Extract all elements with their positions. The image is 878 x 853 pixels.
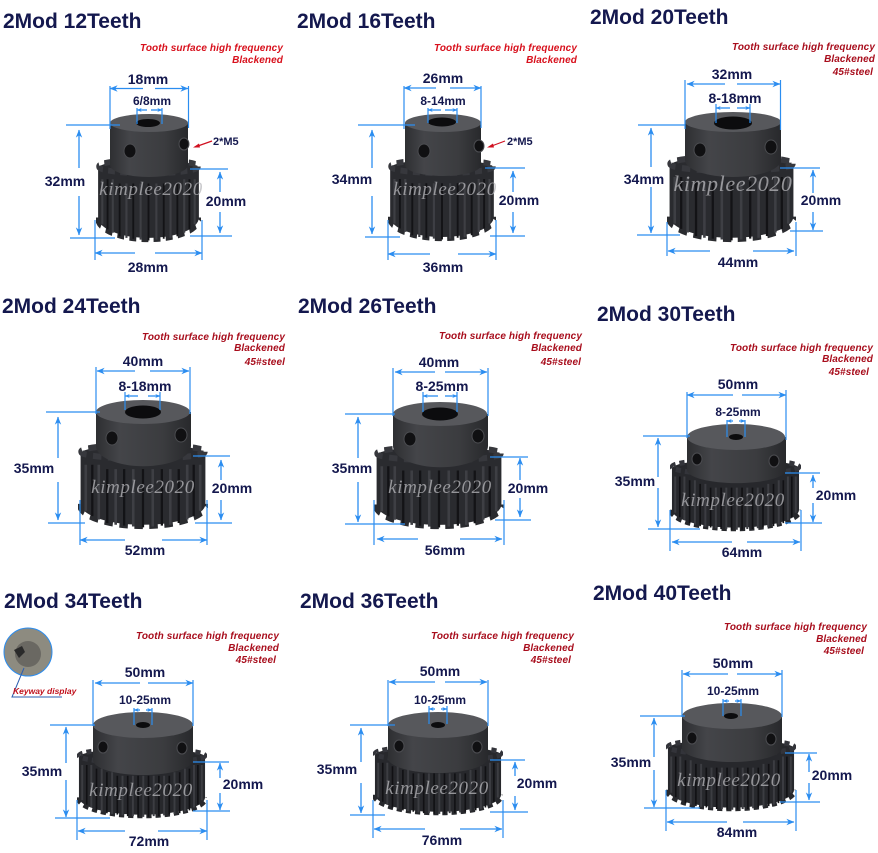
callout: 2*M5	[487, 136, 533, 148]
note: Blackened	[234, 343, 286, 354]
note	[136, 631, 280, 666]
note	[730, 343, 874, 378]
note: 45#steel	[832, 67, 873, 78]
panel: 2Mod 40Teeth	[593, 582, 868, 840]
callout: 2*M5: 2*M5	[507, 136, 533, 148]
gear photo: kimplee2020	[393, 179, 497, 200]
heading: 2Mod 24Teeth	[2, 295, 140, 318]
dimension labels	[624, 66, 841, 270]
callout: 2*M5: 2*M5	[213, 136, 239, 148]
note	[439, 331, 583, 368]
note: Tooth surface high frequency	[724, 622, 867, 633]
dimension labels: 20mm	[499, 192, 539, 208]
dimension labels: 40mm	[419, 354, 459, 370]
panel: 2Mod 24Teeth	[2, 295, 286, 558]
dimension labels: 10-25mm	[707, 684, 759, 698]
dimension labels: 50mm	[713, 655, 753, 671]
note: 45#steel	[244, 357, 285, 368]
gear photo	[79, 400, 207, 527]
dimension labels: 20mm	[517, 775, 557, 791]
note	[724, 622, 868, 657]
note: Tooth surface high frequency	[434, 43, 577, 54]
note: Tooth surface high frequency	[732, 42, 875, 53]
gear photo: kimplee2020	[91, 477, 195, 498]
panel: 2Mod 30Teeth	[597, 303, 874, 560]
heading: 2Mod 26Teeth	[298, 295, 436, 318]
dimension labels	[45, 71, 246, 275]
dimension labels: 64mm	[722, 544, 762, 560]
dimension labels: 26mm	[423, 70, 463, 86]
note: Blackened	[526, 55, 578, 66]
dimension lines	[46, 367, 232, 545]
dimension labels: 32mm	[45, 173, 85, 189]
panel: 2Mod 36Teeth	[300, 590, 575, 848]
gear photo	[375, 402, 503, 527]
note	[732, 42, 876, 78]
gear photo	[668, 112, 795, 240]
dimension labels: 8-18mm	[709, 90, 761, 106]
heading: 2Mod 40Teeth	[593, 582, 731, 605]
dimension labels: 52mm	[125, 542, 165, 558]
dimension lines	[637, 80, 823, 256]
dimension labels: 35mm	[317, 761, 357, 777]
note: 45#steel	[530, 655, 571, 666]
note: Tooth surface high frequency	[140, 43, 283, 54]
dimension labels: 35mm	[22, 763, 62, 779]
dimension lines	[50, 680, 230, 840]
note: 45#steel	[540, 357, 581, 368]
note: Tooth surface high frequency	[136, 631, 279, 642]
dimension labels	[332, 354, 548, 558]
dimension labels: 18mm	[128, 71, 168, 87]
dimension labels	[317, 663, 557, 848]
note: Tooth surface high frequency	[730, 343, 873, 354]
panel: 2Mod 34Teeth	[4, 590, 280, 849]
dimension labels: 84mm	[717, 824, 757, 840]
dimension labels: 20mm	[508, 480, 548, 496]
dimension lines	[640, 670, 820, 831]
dimension labels	[332, 70, 539, 275]
heading: 2Mod 36Teeth	[300, 590, 438, 613]
dimension lines	[643, 390, 822, 551]
dimension labels	[615, 376, 856, 560]
note: 45#steel	[823, 646, 864, 657]
dimension labels: 20mm	[206, 193, 246, 209]
gear photo: kimplee2020	[673, 171, 793, 196]
dimension labels	[22, 664, 263, 849]
inset: keyway display: Keyway display	[13, 686, 78, 696]
dimension labels: 20mm	[816, 487, 856, 503]
note: Tooth surface high frequency	[431, 631, 574, 642]
gear photo	[667, 703, 795, 810]
dimension labels: 35mm	[14, 460, 54, 476]
dimension labels: 34mm	[624, 171, 664, 187]
dimension labels: 50mm	[420, 663, 460, 679]
panel: 2Mod 26Teeth	[298, 295, 583, 558]
gear photo: kimplee2020	[385, 778, 489, 799]
panel: 2Mod 16Teeth	[297, 10, 578, 275]
dimension labels: 32mm	[712, 66, 752, 82]
note	[140, 43, 284, 66]
heading: 2Mod 34Teeth	[4, 590, 142, 613]
dimension labels: 34mm	[332, 171, 372, 187]
dimension lines	[345, 368, 531, 545]
note: Tooth surface high frequency	[439, 331, 582, 342]
panel: 2Mod 20Teeth	[590, 6, 876, 270]
dimension lines	[66, 86, 232, 260]
gear photo	[78, 712, 206, 817]
note: Blackened	[816, 634, 868, 645]
dimension labels: 35mm	[615, 473, 655, 489]
dimension labels: 8-25mm	[416, 378, 468, 394]
gear photo	[374, 712, 502, 814]
note: Tooth surface high frequency	[142, 332, 285, 343]
note: 45#steel	[235, 655, 276, 666]
note	[434, 43, 578, 66]
dimension labels: 10-25mm	[414, 693, 466, 707]
gear photo	[671, 424, 800, 530]
dimension labels: 40mm	[123, 353, 163, 369]
note: Blackened	[824, 54, 876, 65]
dimension labels: 76mm	[422, 832, 462, 848]
heading: 2Mod 20Teeth	[590, 6, 728, 29]
dimension labels: 35mm	[332, 460, 372, 476]
gear photo: kimplee2020	[89, 780, 193, 801]
dimension labels	[14, 353, 252, 558]
dimension labels: 36mm	[423, 259, 463, 275]
callout: 2*M5	[193, 136, 239, 148]
gear photo: kimplee2020	[681, 490, 785, 511]
dimension labels: 50mm	[125, 664, 165, 680]
dimension labels: 8-14mm	[420, 94, 466, 108]
dimension labels: 10-25mm	[119, 693, 171, 707]
dimension labels: 20mm	[212, 480, 252, 496]
dimension lines	[358, 86, 525, 260]
note: Blackened	[822, 354, 874, 365]
note	[142, 332, 286, 368]
gear photo: kimplee2020	[677, 770, 781, 791]
dimension lines	[350, 680, 528, 838]
note: Blackened	[531, 343, 583, 354]
dimension labels: 28mm	[128, 259, 168, 275]
note: Blackened	[228, 643, 280, 654]
gear photo	[389, 114, 497, 239]
dimension labels: 35mm	[611, 754, 651, 770]
dimension labels: 44mm	[718, 254, 758, 270]
inset: keyway display	[4, 628, 78, 697]
note	[431, 631, 575, 666]
dimension labels: 20mm	[223, 776, 263, 792]
dimension labels: 8-25mm	[715, 405, 761, 419]
dimension labels: 8-18mm	[119, 378, 171, 394]
dimension labels: 72mm	[129, 833, 169, 849]
dimension labels: 50mm	[718, 376, 758, 392]
panel: 2Mod 12Teeth	[3, 10, 284, 275]
dimension labels	[611, 655, 852, 840]
dimension labels: 56mm	[425, 542, 465, 558]
heading: 2Mod 30Teeth	[597, 303, 735, 326]
note: Blackened	[232, 55, 284, 66]
heading: 2Mod 12Teeth	[3, 10, 141, 33]
note: 45#steel	[828, 367, 869, 378]
dimension labels: 6/8mm	[133, 94, 171, 108]
heading: 2Mod 16Teeth	[297, 10, 435, 33]
dimension labels: 20mm	[812, 767, 852, 783]
dimension labels: 20mm	[801, 192, 841, 208]
gear photo	[97, 114, 203, 240]
gear photo: kimplee2020	[388, 477, 492, 498]
note: Blackened	[523, 643, 575, 654]
gear photo: kimplee2020	[99, 179, 203, 200]
